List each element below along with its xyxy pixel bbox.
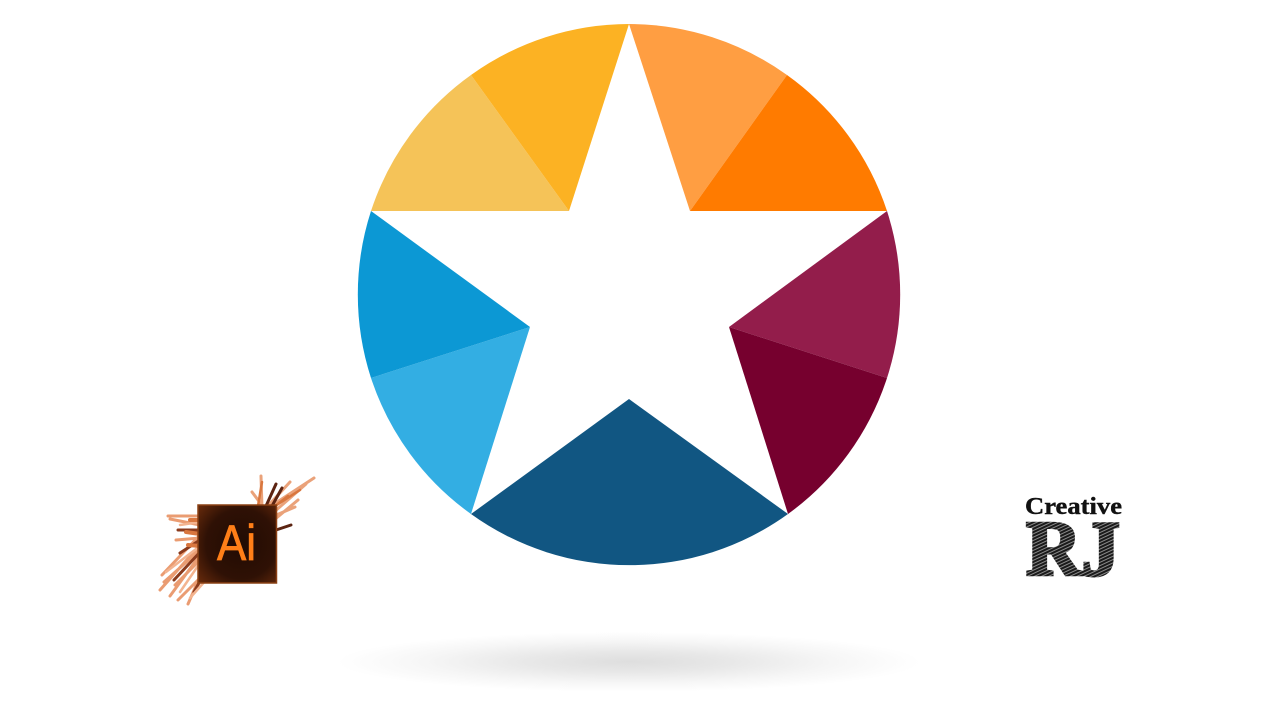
paint splash lower left <box>160 516 206 604</box>
letters: RJ: RJ <box>1026 505 1120 592</box>
logo: Creative RJ <box>1025 494 1122 592</box>
star circle diagram <box>358 24 900 565</box>
segment: light crimson <box>729 211 900 378</box>
icon: Adobe Illustrator logo <box>160 476 314 604</box>
segment: light orange <box>629 24 787 211</box>
segment: navy blue <box>471 399 788 565</box>
word: Creative: Creative <box>1025 494 1122 520</box>
paint splash upper right <box>252 476 314 530</box>
segment: orange <box>690 75 887 211</box>
logo square <box>198 505 276 583</box>
segment: sky blue <box>371 327 530 514</box>
segment: dark crimson <box>729 327 887 514</box>
segment: light yellow <box>371 75 569 211</box>
segment: blue <box>358 211 530 378</box>
segment: yellow <box>471 24 629 211</box>
ground shadow <box>337 632 921 692</box>
logo letters: Ai <box>217 515 256 571</box>
